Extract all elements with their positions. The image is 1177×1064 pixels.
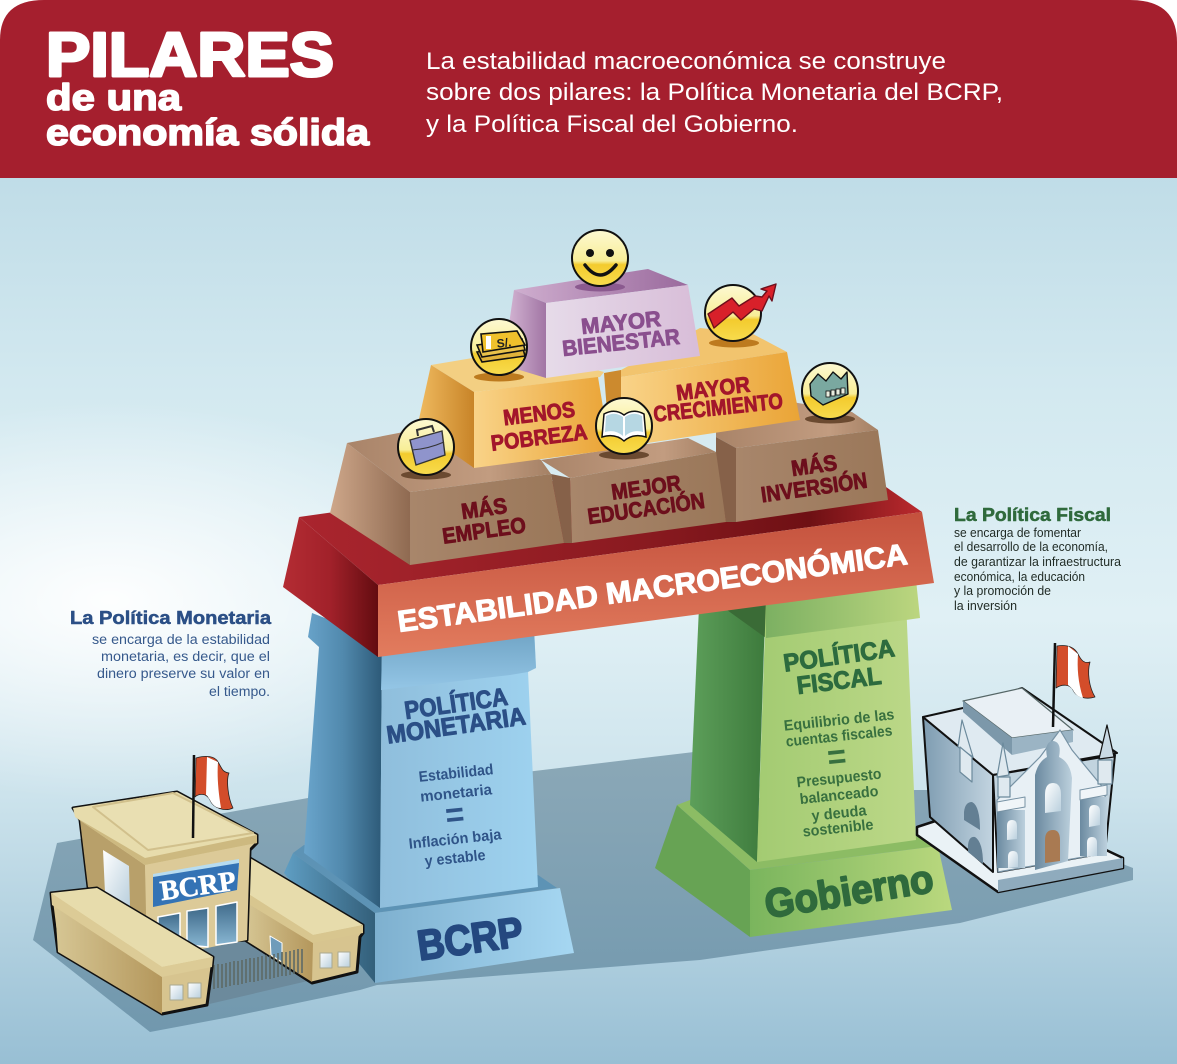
title [46, 21, 369, 153]
pillar label: fiscal policy [782, 633, 897, 700]
beam: Estabilidad macroeconómica [283, 480, 934, 657]
pillar equation: stable money: y estable [424, 847, 486, 870]
header band [0, 0, 1177, 178]
block: mayor bienestar: MAYOR [580, 306, 662, 339]
pillar equation: balanced budget [783, 706, 895, 841]
flag: Peru at Palacio [1053, 643, 1095, 727]
caption: La Política Fiscal: de garantizar la infraestructura [954, 555, 1121, 569]
title: de una [46, 77, 181, 118]
base plate [917, 800, 1123, 892]
caption: La Política Monetaria [70, 608, 272, 699]
caption: La Política Fiscal: y la promoción de [954, 584, 1051, 598]
pillar label: monetary policy: MONETARIA [385, 702, 527, 750]
icon: briefcase [398, 419, 454, 480]
caption: La Política Monetaria: dinero preserve su valor en [97, 666, 270, 681]
caption: La Política Monetaria: se encarga de la estabilidad [92, 632, 270, 647]
fence [210, 949, 302, 990]
pillar equation: stable money: Estabilidad [418, 761, 494, 786]
pillar label: monetary policy [385, 682, 527, 750]
pillar: Política Monetaria (BCRP) [284, 613, 574, 983]
pillar equation: balanced budget: balanceado [799, 783, 879, 808]
block: mejor educación: EDUCACIÓN [586, 488, 706, 529]
header intro text: sobre dos pilares: la Política Monetaria del BCRP, [426, 79, 1003, 106]
block: más inversión [716, 400, 888, 522]
roof [923, 688, 1117, 775]
block: más inversión: INVERSIÓN [759, 468, 869, 507]
block: menos pobreza: POBREZA [489, 419, 589, 456]
title: economía sólida [46, 112, 369, 153]
block: más inversión: MÁS [790, 450, 839, 481]
sign: BCRP: BCRP [158, 866, 238, 907]
building: BCRP [51, 755, 363, 1014]
caption: La Política Monetaria: monetaria, es decir, que el [101, 649, 270, 664]
pillar equation: stable money: Inflación baja [408, 826, 503, 853]
pillar equation: balanced budget: Presupuesto [796, 766, 882, 791]
beam label: ESTABILIDAD MACROECONÓMICA [395, 537, 909, 639]
central portal [1035, 741, 1072, 870]
pillar equation: balanced budget: sostenible [802, 816, 874, 841]
caption: La Política Monetaria: La Política Monetaria [70, 608, 272, 628]
icon: book [596, 398, 652, 460]
block: mejor educación [541, 438, 726, 543]
header intro text: y la Política Fiscal del Gobierno. [426, 111, 798, 138]
pillar equation: stable money [408, 761, 503, 870]
title: PILARES [46, 21, 334, 90]
block: mayor bienestar [503, 269, 700, 378]
caption: La Política Monetaria: el tiempo. [209, 684, 270, 699]
central block [73, 792, 257, 960]
icon: banknotes [471, 319, 527, 382]
pillar: Política Fiscal (Gobierno) [655, 570, 952, 937]
block: más empleo: MÁS [460, 493, 509, 524]
block: menos pobreza [417, 350, 610, 468]
block: mayor crecimiento: CRECIMIENTO [652, 388, 784, 427]
block: más empleo [330, 425, 564, 565]
pillar equation: stable money: = [443, 795, 466, 835]
caption: La Política Fiscal: la inversión [954, 599, 1017, 613]
pillar label: monetary policy: POLÍTICA [403, 682, 510, 725]
icon: banknotes: S/. [496, 335, 512, 351]
facade [993, 755, 1115, 872]
caption: La Política Fiscal [954, 505, 1121, 613]
floor shadow [33, 752, 1133, 1032]
block: mayor crecimiento: MAYOR [675, 372, 751, 405]
caption: La Política Fiscal: se encarga de fomentar [954, 526, 1081, 540]
header intro text: La estabilidad macroeconómica se construye [426, 48, 946, 75]
building: Palacio de Gobierno [917, 643, 1123, 892]
block: más empleo: EMPLEO [441, 512, 527, 549]
block: mayor crecimiento [604, 328, 800, 450]
left wing [51, 888, 213, 1014]
pillar equation: balanced budget: Equilibrio de las [783, 706, 895, 735]
pillar base label: Gobierno: Gobierno [762, 857, 936, 927]
caption: La Política Fiscal: La Política Fiscal [954, 505, 1111, 525]
pillar label: fiscal policy: FISCAL [795, 662, 883, 700]
block: menos pobreza: MENOS [502, 397, 576, 430]
glass doors [158, 902, 237, 947]
pillar equation: balanced budget: cuentas fiscales [785, 722, 893, 751]
pillar equation: balanced budget: y deuda [811, 802, 868, 825]
caption: La Política Fiscal: económica, la educación [954, 570, 1085, 584]
pillar label: fiscal policy: POLÍTICA [782, 633, 897, 678]
left wall [923, 717, 993, 872]
side arches [964, 802, 980, 830]
header intro text [426, 48, 1003, 138]
icon: factory [802, 363, 858, 424]
block: mayor bienestar: BIENESTAR [561, 324, 681, 361]
caption: La Política Fiscal: el desarrollo de la economía, [954, 540, 1108, 554]
spires [958, 720, 1114, 797]
background glow [0, 400, 490, 800]
block: mejor educación: MEJOR [610, 470, 683, 505]
towers [997, 785, 1107, 868]
pillar equation: balanced budget: = [825, 737, 848, 777]
pillar base label: BCRP: BCRP [414, 908, 526, 969]
flag: Peru at BCRP [193, 755, 233, 838]
pillar equation: stable money: monetaria [419, 781, 493, 806]
right wing [245, 858, 363, 983]
icon: growth arrow [705, 284, 776, 348]
icon: smiley [572, 230, 628, 292]
